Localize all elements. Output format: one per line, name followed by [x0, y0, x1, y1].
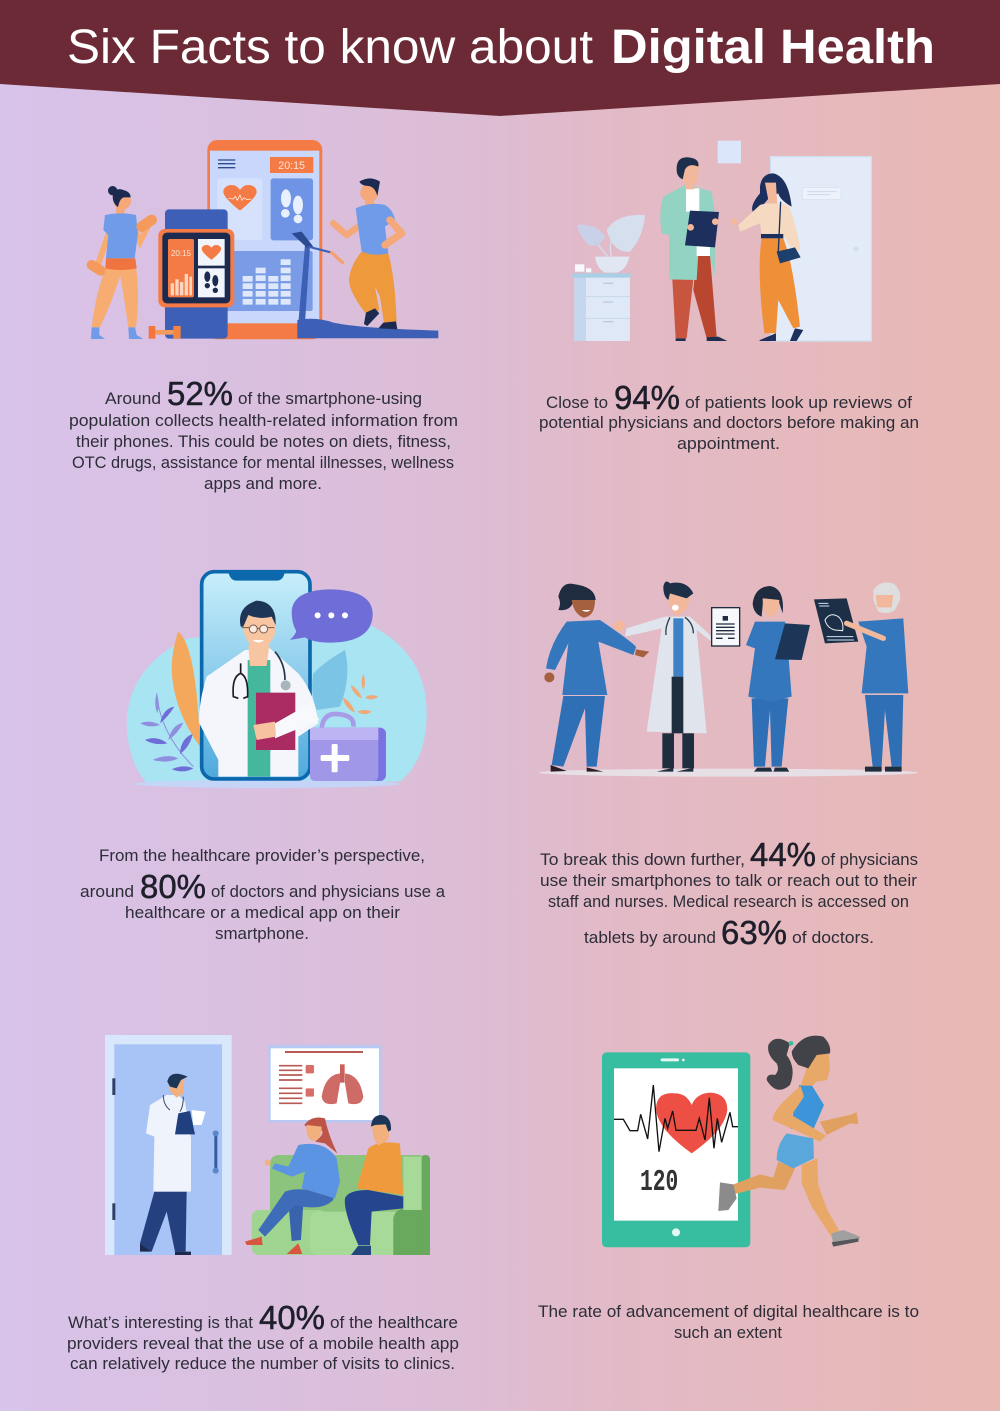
text: 44% and 63% fact: staff and nurses. Medical research is accessed on [548, 892, 909, 911]
seated woman [245, 1117, 340, 1254]
sofa [252, 1155, 430, 1255]
title: Digital Health [611, 21, 935, 74]
text: 94% fact: Close to [546, 393, 608, 412]
illustration: tablet heart rate and runner [602, 1036, 860, 1247]
text: 94% fact: potential physicians and doctors before making an [539, 413, 919, 432]
nurse with clipboard [746, 586, 810, 772]
illustration: fitness app on phone and smartwatch: 20:15 [171, 249, 192, 258]
seated man [345, 1115, 403, 1255]
text: 52% fact: 52% [167, 375, 233, 412]
text: 44% and 63% fact: of doctors. [792, 928, 874, 947]
panel: fact 3 doctors using apps [80, 572, 446, 943]
text: 94% fact: 94% [614, 379, 680, 416]
illustration: medical team of four [538, 581, 918, 777]
illustration: fitness app on phone and smartwatch [91, 140, 438, 339]
lungs poster [268, 1045, 382, 1122]
text: 52% fact: OTC drugs, assistance for mental illnesses, wellness [72, 453, 454, 472]
text: 94% fact: of patients look up reviews of [685, 393, 912, 412]
panel: fact 2 patient reviews [539, 141, 919, 453]
text: 80% fact: smartphone. [215, 924, 309, 943]
text: 40% fact: providers reveal that the use of a mobile health app [67, 1334, 459, 1353]
woman with dumbbells [91, 186, 152, 339]
text: rate of advancement: such an extent [674, 1323, 782, 1342]
text: rate of advancement [538, 1302, 919, 1342]
nurse with outstretched arm [544, 584, 649, 772]
title banner [0, 0, 1000, 116]
tablet [602, 1052, 750, 1247]
text: 44% and 63% fact: To break this down further, [540, 850, 745, 869]
text: 40% fact [67, 1299, 459, 1373]
illustration: doctor at door and patients on sofa [105, 1035, 430, 1255]
text: 80% fact: of doctors and physicians use a [211, 882, 446, 901]
text: 94% fact: appointment. [677, 434, 780, 453]
senior doctor with x-ray [814, 582, 908, 772]
text: 52% fact: their phones. This could be notes on diets, fitness, [76, 432, 451, 451]
text: rate of advancement: The rate of advancement of digital healthcare is to [538, 1302, 919, 1321]
patient with handbag [731, 173, 803, 341]
title: Six Facts to know about [67, 21, 593, 74]
illustration: fitness app on phone and smartwatch: 20:15 [278, 160, 305, 172]
runner [718, 1036, 860, 1247]
text: 44% and 63% fact: 63% [721, 914, 787, 951]
text: 80% fact: around [80, 882, 134, 901]
text: 52% fact: population collects health-related information from [69, 411, 458, 430]
text: 80% fact [80, 846, 446, 943]
title [67, 21, 935, 74]
text: 44% and 63% fact: use their smartphones to talk or reach out to their [540, 871, 917, 890]
panel: fact 4 physicians and staff [538, 581, 918, 951]
text: 44% and 63% fact: tablets by around [584, 928, 716, 947]
man on treadmill [333, 178, 402, 329]
text: 52% fact [69, 375, 458, 493]
text: 40% fact: of the healthcare [330, 1313, 458, 1332]
panel: fact 5 fewer clinic visits [67, 1035, 459, 1373]
text: 44% and 63% fact [540, 836, 918, 951]
speech bubble [290, 589, 373, 643]
text: 52% fact: apps and more. [204, 474, 322, 493]
text: 94% fact [539, 379, 919, 453]
text: 44% and 63% fact: 44% [750, 836, 816, 873]
text: 80% fact: From the healthcare provider’s perspective, [99, 846, 425, 865]
text: 44% and 63% fact: of physicians [821, 850, 918, 869]
tablet: 120 [640, 1165, 678, 1200]
text: 40% fact: What’s interesting is that [68, 1313, 253, 1332]
doctor at door [140, 1074, 206, 1255]
illustration: doctor and patient at office door [572, 141, 871, 341]
doctor with clipboard [660, 157, 727, 341]
text: 52% fact: of the smartphone-using [238, 389, 422, 408]
text: 40% fact: 40% [259, 1299, 325, 1336]
doctor in white coat [614, 581, 740, 772]
panel: fact 1 smartphone health information [69, 140, 458, 493]
panel: fact 6 pace of advancement [538, 1036, 919, 1342]
text: 40% fact: can relatively reduce the number of visits to clinics. [70, 1354, 455, 1373]
text: 80% fact: healthcare or a medical app on their [125, 903, 400, 922]
text: 52% fact: Around [105, 389, 161, 408]
text: 80% fact: 80% [140, 868, 206, 905]
illustration: doctor on smartphone screen [127, 572, 427, 788]
doctor in lab coat [199, 601, 319, 777]
